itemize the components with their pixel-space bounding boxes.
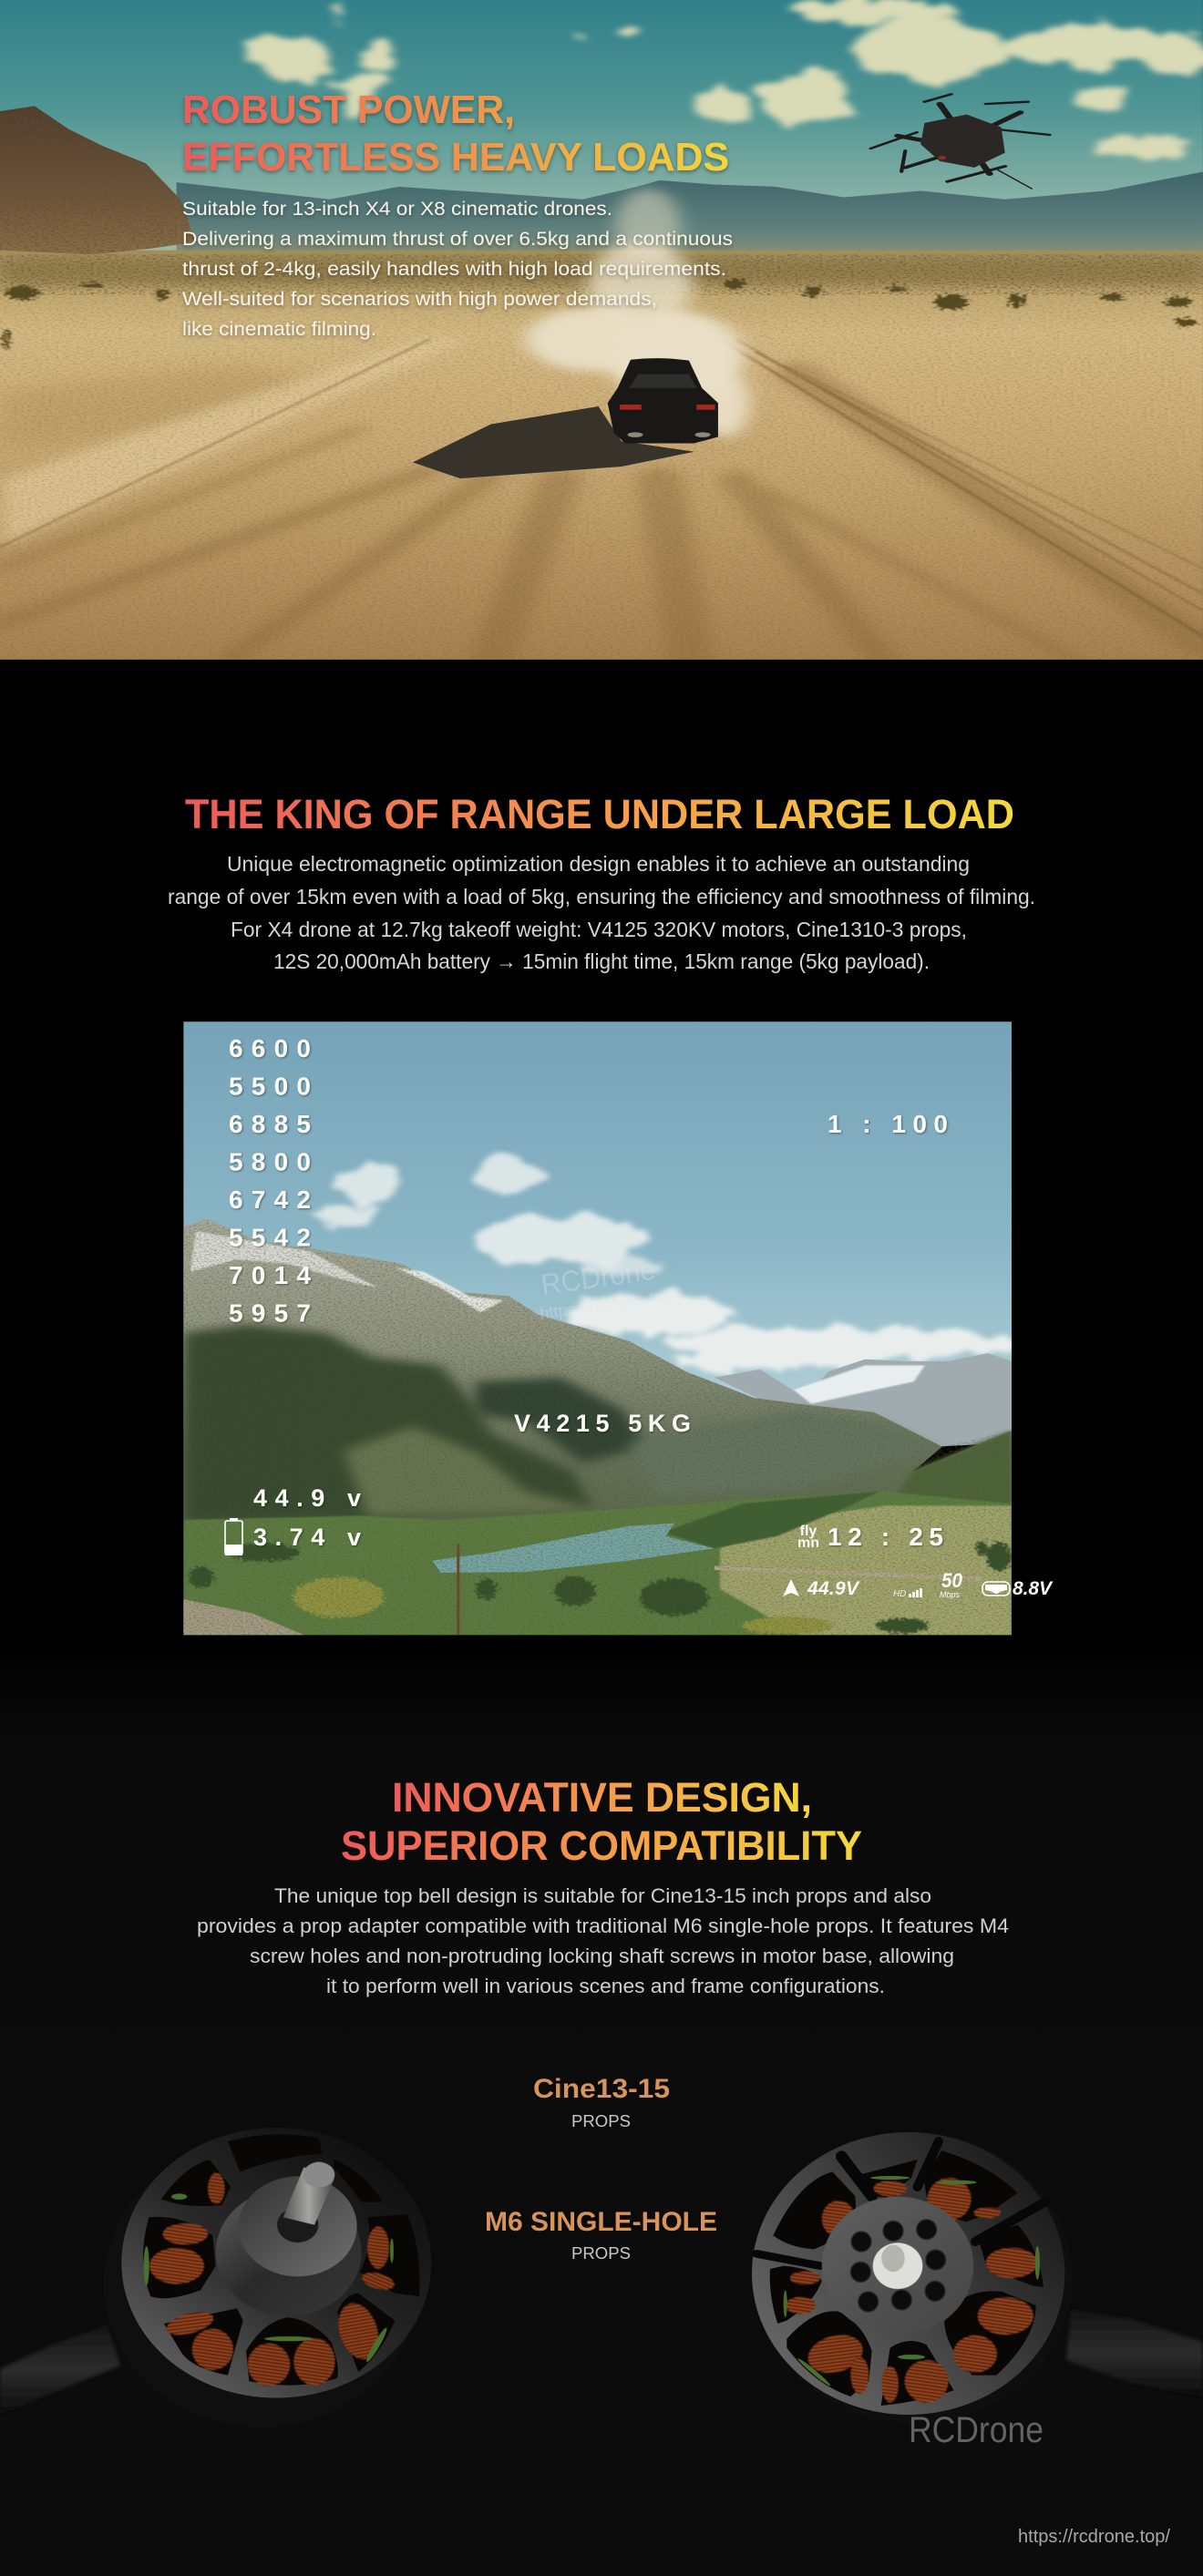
- HUD: bitrate: 50: [941, 1569, 963, 1592]
- section heading: king of range: THE KING OF RANGE UNDER LARGE LOAD: [185, 791, 1014, 837]
- motor base: [103, 2141, 419, 2427]
- main mountain: [183, 1219, 1012, 1635]
- watermark in photo: https://rcdrone.top/: [539, 1286, 678, 1323]
- label: M6 single-hole props: M6 SINGLE-HOLE: [485, 2207, 717, 2237]
- valley meadow: [183, 1492, 1012, 1635]
- ground fine grain: [0, 292, 1203, 660]
- HUD: cell voltage: 3.74 v: [253, 1524, 361, 1551]
- watermark in photo: [534, 1250, 678, 1323]
- snow patches: [190, 1231, 378, 1288]
- thin tyre tracks: [0, 335, 1203, 636]
- shaft tip: [303, 2162, 334, 2188]
- section heading: innovative design: SUPERIOR COMPATIBILITY: [341, 1822, 862, 1869]
- dark forest left: [183, 1325, 594, 1524]
- rear window: [629, 375, 696, 388]
- icon: cinematic drone: [870, 94, 1050, 189]
- distant mountains: [177, 171, 1203, 251]
- soft dark track bands: [0, 374, 1203, 660]
- distant snowy peaks: [715, 1353, 1012, 1447]
- section body: range: For X4 drone at 12.7kg takeoff weight: V4125 320KV motors, Cine1310-3 props,: [231, 918, 967, 941]
- watermark: RCDrone: RCDrone: [909, 2410, 1044, 2450]
- HUD: motor rpm column: 5800: [229, 1148, 311, 1175]
- HUD: motor rpm column: 7014: [229, 1261, 311, 1289]
- HUD: flight time unit: mn: [797, 1535, 819, 1551]
- HUD: motor rpm column: 5500: [229, 1072, 311, 1101]
- section heading: innovative design: [341, 1774, 862, 1869]
- label: Cine13-15 props: PROPS: [571, 2112, 631, 2130]
- pale slope strip: [344, 1426, 606, 1516]
- rock texture: [0, 106, 196, 254]
- right motor cable: [1066, 2310, 1203, 2396]
- label: M6 single-hole props: [485, 2207, 717, 2263]
- terrain grain: [183, 1219, 1012, 1635]
- lake: [432, 1524, 715, 1573]
- HUD: bitrate: [940, 1569, 963, 1599]
- section body: compatibility: it to perform well in various scenes and frame configurations.: [326, 1975, 885, 1997]
- scene clouds: [313, 1155, 1022, 1372]
- desert ground: [0, 251, 1203, 660]
- label: M6 single-hole props: PROPS: [571, 2244, 631, 2263]
- hero heading: EFFORTLESS HEAVY LOADS: [182, 135, 729, 180]
- panel: FPV mountain view: [183, 1021, 1022, 1635]
- left shoulder patch: [4, 366, 293, 441]
- HUD: goggle voltage: 8.8V: [1013, 1578, 1054, 1599]
- mounting holes: [850, 2220, 946, 2312]
- HUD: HD signal: [893, 1588, 922, 1599]
- car shadow: [413, 406, 694, 478]
- HUD: motor rpm column: 5957: [229, 1299, 311, 1327]
- hero body text: Delivering a maximum thrust of over 6.5kg and a continuous: [182, 229, 733, 250]
- centre bearing: [873, 2242, 922, 2289]
- HUD: motor rpm column: 6600: [229, 1034, 311, 1062]
- icon: goggles: [982, 1582, 1010, 1596]
- hero body text: Well-suited for scenarios with high power demands,: [182, 289, 657, 310]
- HUD: motor rpm column: 6742: [229, 1185, 311, 1214]
- hero heading: ROBUST POWER,: [182, 87, 515, 132]
- snow ridge: [396, 1267, 503, 1312]
- hub base: [216, 2189, 362, 2316]
- foreground rocks: [183, 1599, 304, 1635]
- copper windings: [149, 2172, 396, 2386]
- HUD: motor rpm column: 5542: [229, 1223, 311, 1252]
- copper windings: [786, 2178, 1037, 2403]
- icon: battery: [225, 1518, 242, 1555]
- yellow shrubs: [293, 1576, 834, 1635]
- HUD: bitrate: Mbps: [940, 1590, 960, 1599]
- road: [715, 1568, 982, 1579]
- pale road edge: [0, 339, 468, 547]
- hero body text: thrust of 2-4kg, easily handles with high load requirements.: [182, 259, 726, 280]
- right slope: [629, 1410, 937, 1495]
- HUD: flight time unit: [797, 1524, 819, 1551]
- panel: hero desert photo: [0, 0, 1203, 660]
- section body: range: Unique electromagnetic optimization design enables it to achieve an outstanding: [227, 852, 970, 876]
- section body: compatibility: provides a prop adapter compatible with traditional M6 single-hole props. It features M4: [197, 1914, 1009, 1937]
- label: Cine13-15 props: [533, 2074, 670, 2130]
- scene sky: [183, 1021, 1012, 1429]
- desert shrubs: [3, 279, 1196, 350]
- label: Cine13-15 props: Cine13-15: [533, 2074, 670, 2104]
- car body: [608, 358, 718, 443]
- HUD: motor rpm column: 6885: [229, 1110, 311, 1138]
- threaded shaft: [283, 2167, 334, 2225]
- HUD: HD signal: HD: [893, 1589, 906, 1599]
- HUD: motor and payload: V4215 5KG: [514, 1410, 691, 1437]
- tail lights: [620, 405, 715, 410]
- HUD: motor rpm column: [229, 1034, 311, 1327]
- utility pole: [457, 1545, 459, 1635]
- winding pockets: [770, 2150, 1044, 2406]
- sky: [0, 0, 1203, 272]
- section body: compatibility: screw holes and non-protruding locking shaft screws in motor base, allowing: [250, 1945, 954, 1967]
- foreground trees: [190, 1541, 1012, 1633]
- hub top: [239, 2176, 357, 2276]
- watermark in photo: RCDrone: [539, 1253, 657, 1301]
- HUD: air unit voltage: 44.9V: [807, 1578, 860, 1599]
- clouds: [242, 0, 1203, 159]
- motor base: [756, 2132, 1073, 2424]
- section body: range: [168, 852, 1035, 973]
- right green hill: [891, 1431, 1012, 1508]
- section heading: innovative design: INNOVATIVE DESIGN,: [392, 1774, 812, 1821]
- HUD: flight time unit: fly: [800, 1524, 817, 1539]
- dark forest middle: [475, 1378, 646, 1463]
- section body: compatibility: [197, 1884, 1009, 1997]
- section body: range: range of over 15km even with a load of 5kg, ensuring the efficiency and smoothness of filming.: [168, 885, 1035, 908]
- bell: [121, 2128, 431, 2398]
- hero body text: Suitable for 13-inch X4 or X8 cinematic drones.: [182, 199, 612, 220]
- motor: left, shaft side: [103, 2128, 431, 2427]
- HUD: pack voltage: 44.9 v: [253, 1484, 361, 1512]
- hero body text: [182, 199, 733, 340]
- scrub band: [0, 260, 1203, 286]
- dust plume: [526, 189, 749, 436]
- shaft pin: [881, 2245, 905, 2272]
- distant snow: [794, 1365, 925, 1404]
- HUD: flight time: 12 : 25: [828, 1523, 943, 1551]
- scrub texture: [0, 254, 1203, 295]
- hub: [822, 2197, 973, 2335]
- winding pockets: [143, 2134, 420, 2386]
- dark spoke grooves: [756, 2141, 1045, 2266]
- rock mountain: [0, 106, 196, 254]
- section body: compatibility: The unique top bell design is suitable for Cine13-15 inch props and also: [274, 1884, 931, 1907]
- shaft collar: [277, 2207, 318, 2242]
- panel: compatibility section background: [0, 1636, 1203, 2576]
- watermark: url: https://rcdrone.top/: [1018, 2527, 1170, 2547]
- icon: navigation arrow: [783, 1579, 799, 1596]
- hero heading: [182, 87, 729, 180]
- HUD: ratio: 1 : 100: [828, 1110, 948, 1138]
- exhausts: [628, 432, 711, 437]
- car: [608, 358, 718, 443]
- green insulation accents: [784, 2176, 1040, 2387]
- green insulation accents: [144, 2193, 394, 2364]
- left motor cable: [0, 2325, 120, 2415]
- bell: [752, 2132, 1064, 2415]
- section body: range: 12S 20,000mAh battery → 15min flight time, 15km range (5kg payload).: [273, 949, 930, 973]
- motor: right, base side: [752, 2132, 1073, 2424]
- dry hillside: [720, 1505, 1012, 1635]
- green river forest: [663, 1492, 879, 1548]
- hero body text: like cinematic filming.: [182, 319, 376, 340]
